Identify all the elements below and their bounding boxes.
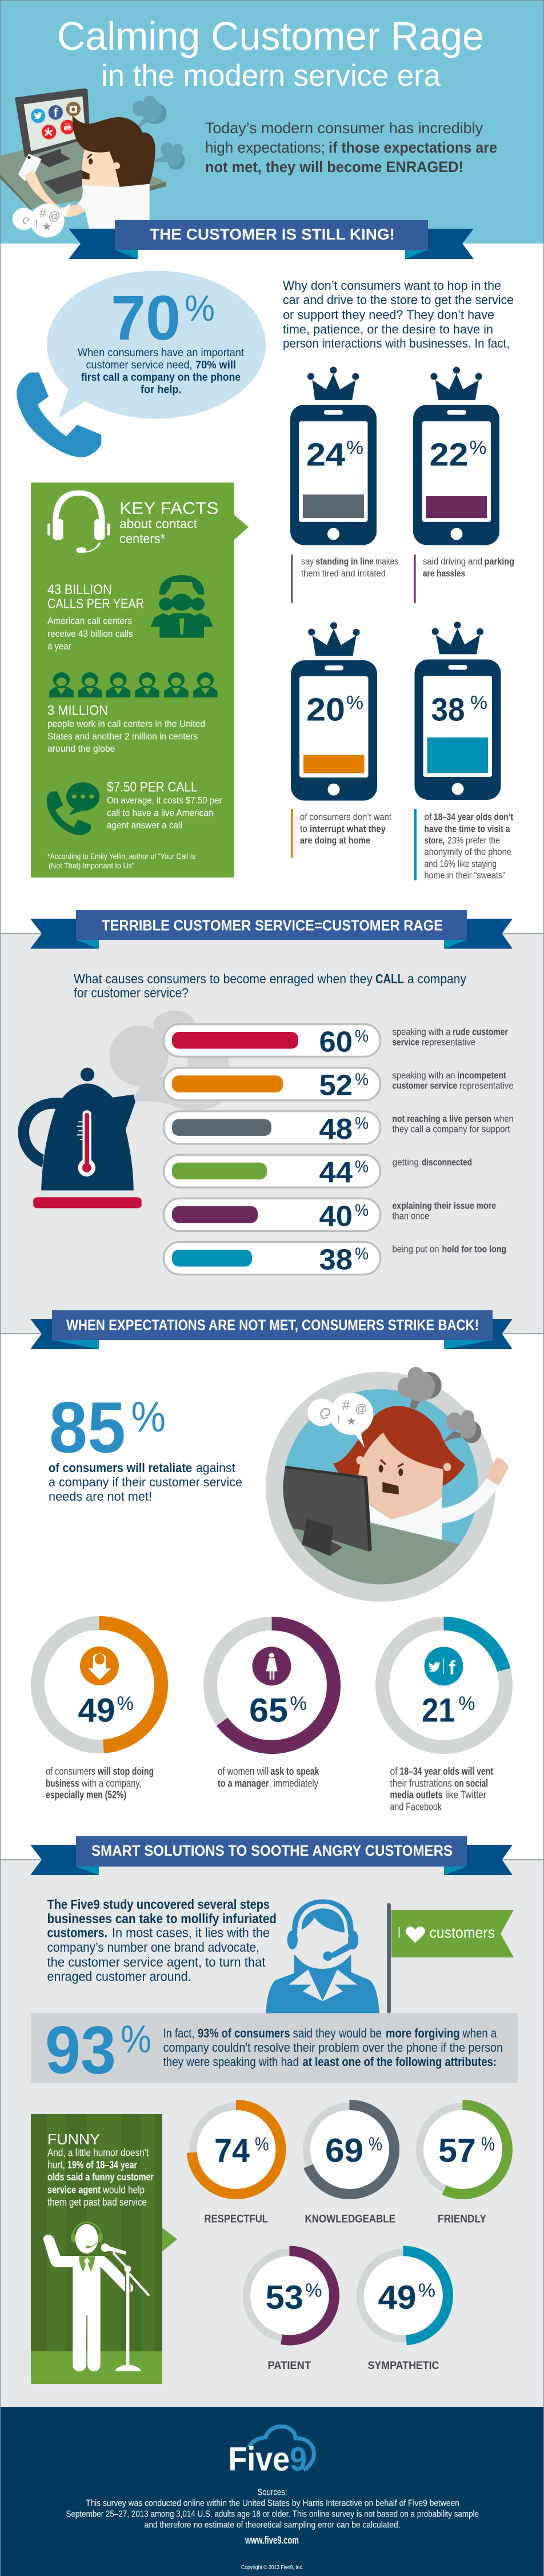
text: why don't consumers: Why don’t consumers want to hop in the	[283, 278, 501, 293]
stat: 85% retaliate: against	[196, 1461, 235, 1475]
text: why don't consumers: or support they need? They don’t have	[283, 308, 494, 322]
speech bubble: 70% call first: for help.	[141, 384, 182, 396]
question heading: for customer service?	[74, 986, 189, 1000]
fact: $7.50 per call: $7.50 PER CALL	[107, 780, 198, 795]
bar: getting disconnected 44%: %	[355, 1158, 369, 1177]
bar: rude representative 60%: speaking with a	[392, 1027, 451, 1037]
bar: rude representative 60%: service	[392, 1037, 419, 1047]
bar: rude representative 60%	[163, 1024, 508, 1058]
donut: 74% respectful: 74	[214, 2132, 250, 2169]
panel: 93% more forgiving: when a	[462, 2026, 497, 2040]
phone: 24%: them tired and irritated	[301, 568, 386, 579]
panel: key facts	[31, 482, 249, 878]
donut: 21% vent on social media: on social	[454, 1778, 488, 1789]
donut: 65% of women ask for manager: to a manager	[218, 1778, 269, 1789]
question heading: What causes consumers to become enraged when they	[74, 971, 373, 986]
donut: 49% stop doing business: especially men (52%)	[46, 1789, 126, 1801]
heading: key facts: KEY FACTS	[119, 499, 218, 518]
panel: 93% more forgiving: In fact,	[163, 2026, 194, 2040]
phone: 20%: 20	[306, 692, 345, 728]
panel: funny: olds said a funny customer	[47, 2171, 154, 2183]
bar: incompetent representative 52%: incompetent	[457, 1070, 506, 1080]
icon: comedian at microphone	[43, 2222, 149, 2371]
donut: 49% stop doing business: with a company,	[81, 1778, 142, 1789]
donut: 65% of women ask for manager: , immediately	[269, 1778, 318, 1789]
fact: 3 million: around the globe	[47, 743, 115, 754]
donut: 65% of women ask for manager: ask to speak	[271, 1765, 319, 1777]
phone: 38%	[414, 621, 513, 880]
sources: September 25–27, 2013 among 3,014 U.S. adults age 18 or older. This online survey is not based on a probability sample	[66, 2510, 479, 2519]
donut: 21% vent on social media: f	[449, 1657, 455, 1679]
speech bubble: 70% call first	[47, 271, 266, 418]
panel: funny: FUNNY	[47, 2132, 100, 2148]
question heading: CALL	[375, 971, 404, 986]
phone: 24%	[290, 367, 398, 603]
fact: $7.50 per call: call to have a live American	[107, 807, 214, 819]
phone: 38%: %	[470, 692, 487, 713]
icon: telephone handset	[17, 373, 101, 457]
illustration: angry woman at computer: ★	[346, 1415, 357, 1428]
flag: I love customers	[387, 1903, 514, 2013]
icon: white headset	[47, 491, 110, 553]
donut: 49% stop doing business	[38, 1623, 161, 1801]
bar: on hold too long 38%: 38	[319, 1243, 353, 1276]
phone: 22%: 22	[430, 437, 469, 473]
banner: the customer is still king	[69, 220, 474, 259]
icon: customer service agent	[266, 1899, 379, 2013]
panel: 93% more forgiving: they were speaking with had	[163, 2055, 299, 2069]
phone: 20%	[291, 622, 391, 858]
bar: rude representative 60%: representative	[422, 1037, 475, 1047]
donut: 53% patient: PATIENT	[267, 2360, 311, 2372]
panel: 93% more forgiving: 93% of consumers	[198, 2026, 290, 2040]
donut: 74% respectful: %	[255, 2134, 269, 2154]
stat: 85% retaliate: needs are not met!	[49, 1489, 152, 1504]
phone: 22%	[413, 367, 514, 603]
intro text: not met, they will become ENRAGED!	[205, 158, 463, 176]
illustration: angry man at computer: f	[54, 106, 58, 120]
donut: 49% stop doing business: will stop doing	[97, 1765, 154, 1777]
fact: 43 billion calls: American call centers	[47, 615, 132, 627]
speech bubble: man cursing: @	[48, 210, 61, 223]
footnote	[47, 852, 195, 870]
illustration: angry man at computer: You	[65, 123, 71, 127]
text: why don't consumers: car and drive to the store to get the service	[283, 293, 514, 307]
phone: 38%: 23% prefer the	[447, 836, 500, 846]
donut: 57% friendly: %	[481, 2134, 495, 2154]
fact: 43 billion calls: 43 BILLION	[47, 582, 112, 597]
panel: 93% more forgiving: %	[121, 2017, 151, 2061]
text: Five9 study: The Five9 study uncovered several steps	[47, 1897, 270, 1912]
panel: funny: hurt,	[47, 2159, 65, 2171]
sources: and therefore no estimate of theoretical sampling error can be calculated.	[144, 2520, 400, 2530]
phone: 38%: and 16% like staying	[424, 859, 497, 869]
panel: funny: And, a little humor doesn't	[47, 2147, 149, 2159]
footnote: (Not That) Important to Us”	[49, 861, 134, 870]
illustration: angry woman at computer: #	[342, 1398, 350, 1413]
flag: I love customers: I	[398, 1924, 401, 1941]
phone: 20%: of consumers don’t want	[300, 812, 391, 822]
fact: 43 billion calls: a year	[47, 641, 71, 652]
bar: on hold too long 38%: %	[355, 1245, 369, 1263]
phone: 38%: store,	[424, 836, 445, 846]
bar: rude representative 60%: %	[355, 1027, 369, 1046]
donut: 21% vent on social media: and Facebook	[390, 1801, 442, 1812]
bar: not reaching a live person 48%: when	[494, 1114, 513, 1124]
fact: 43 billion calls: CALLS PER YEAR	[47, 596, 144, 612]
phone: 20%: interrupt what they	[310, 824, 386, 835]
donut: 21% vent on social media: %	[458, 1693, 475, 1714]
banner: terrible customer service	[30, 910, 513, 949]
illustration: angry woman at computer: @	[355, 1402, 367, 1415]
text: Five9 study: customers.	[47, 1925, 107, 1940]
panel: 93% more forgiving: said they would be	[293, 2026, 382, 2040]
phone: 24%: makes	[375, 557, 398, 567]
donut: 65% of women ask for manager	[210, 1624, 334, 1789]
donut: 49% sympathetic: SYMPATHETIC	[368, 2360, 439, 2372]
stat: 85% retaliate: of consumers will retaliate	[49, 1461, 192, 1475]
phone: 38%: 18–34 year olds don’t	[434, 812, 513, 822]
fact: 43 billion calls: receive 43 billion calls	[47, 628, 133, 639]
text: why don't consumers: time, patience, or the desire to have in	[283, 322, 493, 336]
donut: 53% patient: %	[305, 2280, 322, 2300]
title: Calming Customer Rage	[57, 14, 484, 58]
intro text: Today’s modern consumer has incredibly	[205, 119, 483, 137]
illustration: angry woman at computer	[263, 1367, 510, 1614]
bar: rude representative 60%: 60	[319, 1026, 353, 1058]
bar: incompetent representative 52%	[163, 1068, 513, 1102]
stat: 85% retaliate: a company if their customer service	[49, 1475, 242, 1489]
fact: $7.50 per call	[107, 780, 222, 831]
fact: 43 billion calls	[47, 582, 144, 652]
intro text: high expectations;	[205, 139, 325, 156]
question heading	[74, 971, 466, 1000]
banner: the customer is still king: THE CUSTOMER IS STILL KING!	[150, 226, 395, 243]
phone: 22%: %	[470, 437, 487, 458]
bar: explaining more than once 40%	[163, 1198, 496, 1232]
panel: funny	[31, 2114, 177, 2384]
intro text: if those expectations are	[329, 139, 497, 156]
donut: 21% vent on social media: media outlets	[390, 1789, 442, 1801]
icon: boiling kettle with thermometer	[18, 1011, 229, 1208]
text: Five9 study: enraged customer around.	[47, 1969, 191, 1984]
speech bubble: man cursing: #	[39, 206, 47, 220]
phone: 24%: standing in line	[315, 557, 374, 567]
bar: on hold too long 38%: hold for too long	[442, 1244, 506, 1254]
donut: 74% respectful: RESPECTFUL	[205, 2214, 268, 2225]
text: Five9 study: businesses can take to mollify infuriated	[47, 1911, 277, 1926]
icon: phone with chat bubble	[47, 782, 99, 835]
phone: 38%: anonymity of the phone	[424, 847, 511, 858]
panel: 93% more forgiving: company couldn't resolve their problem over the phone if the person	[163, 2040, 503, 2055]
bar: incompetent representative 52%: %	[355, 1070, 369, 1089]
speech bubble: man cursing: !	[35, 218, 38, 230]
phone: 24%: say	[301, 557, 314, 567]
title	[57, 14, 484, 93]
donut: 49% stop doing business: 49	[78, 1692, 115, 1729]
stat: 85% retaliate: %	[131, 1393, 166, 1441]
speech bubble: man cursing	[13, 204, 70, 238]
bar: on hold too long 38%	[163, 1242, 506, 1276]
donut: 69% knowledgeable: 69	[325, 2132, 363, 2169]
heading: key facts: centers*	[119, 531, 165, 546]
bar: explaining more than once 40%: explaining their issue more	[392, 1201, 496, 1211]
bar: incompetent representative 52%: speaking with an	[392, 1070, 455, 1080]
donut: 69% knowledgeable: KNOWLEDGEABLE	[305, 2214, 395, 2225]
donut: 49% stop doing business: of consumers	[46, 1765, 95, 1777]
speech bubble: 70% call first: first call a company on the phone	[81, 372, 241, 384]
speech bubble: 70% call first: %	[185, 288, 215, 329]
bar: incompetent representative 52%: customer service	[392, 1080, 457, 1091]
donut: 53% patient: 53	[265, 2279, 303, 2316]
text: Five9 study: the customer service agent, to turn that	[47, 1955, 266, 1969]
fact: $7.50 per call: agent answer a call	[107, 820, 182, 831]
donut: 65% of women ask for manager: %	[290, 1693, 307, 1714]
footnote: *According to Emily Yellin, author of “Your Call Is	[47, 852, 195, 861]
bar: explaining more than once 40%: %	[355, 1201, 369, 1220]
donut: 53% patient	[245, 2251, 334, 2372]
bar: explaining more than once 40%: 40	[319, 1199, 353, 1232]
banner: consumers strike back: WHEN EXPECTATIONS ARE NOT MET, CONSUMERS STRIKE BACK!	[66, 1316, 479, 1333]
donut: 49% sympathetic: 49	[378, 2279, 416, 2316]
speech bubble: man cursing: ★	[42, 221, 52, 233]
copyright: Copyright © 2013 Five9, Inc.	[241, 2564, 303, 2571]
phone: 24%: 24	[306, 437, 345, 473]
bar: getting disconnected 44%: disconnected	[422, 1157, 472, 1167]
phone: 22%: parking	[485, 557, 514, 567]
donut: 21% vent on social media: like Twitter	[445, 1789, 486, 1801]
speech bubble: 70% call first: 70	[111, 283, 181, 353]
donut: 21% vent on social media: 21	[422, 1692, 455, 1729]
donut: 21% vent on social media	[382, 1624, 506, 1812]
donut: 57% friendly: 57	[438, 2132, 476, 2169]
donut: 21% vent on social media: their frustrations	[390, 1778, 452, 1789]
logo: Five9	[229, 2426, 314, 2478]
phone: 38%: 38	[431, 692, 465, 728]
intro text	[205, 119, 497, 176]
bar: getting disconnected 44%: 44	[319, 1156, 353, 1189]
phone: 38%: have the time to visit a	[424, 824, 510, 835]
banner: terrible customer service: TERRIBLE CUSTOMER SERVICE=CUSTOMER RAGE	[102, 917, 443, 934]
bar: getting disconnected 44%: getting	[392, 1157, 419, 1167]
donut: 65% of women ask for manager: 65	[249, 1692, 288, 1729]
speech bubble: 70% call first: customer service need,	[86, 359, 192, 372]
stat: 85% retaliate	[49, 1387, 242, 1504]
panel: 93% more forgiving	[31, 2012, 518, 2088]
donut: 49% sympathetic	[359, 2251, 448, 2372]
donut: 49% stop doing business: %	[117, 1693, 134, 1714]
text: Five9 study: In most cases, it lies with the	[112, 1925, 270, 1940]
phone: 24%: %	[346, 437, 363, 458]
bar: rude representative 60%: rude customer	[453, 1027, 508, 1037]
icon: call center team	[150, 575, 213, 638]
panel: funny: would help	[102, 2184, 145, 2195]
panel: 93% more forgiving: at least one of the following attributes:	[303, 2055, 497, 2069]
bar: explaining more than once 40%: than once	[392, 1211, 429, 1221]
stat: 85% retaliate: 85	[49, 1387, 126, 1468]
illustration: angry man at computer: Tube	[64, 127, 71, 130]
logo: Five9: TM	[304, 2469, 308, 2472]
fact: $7.50 per call: On average, it costs $7.50 per	[107, 795, 222, 806]
speech bubble: 70% call first: 70% will	[195, 359, 236, 372]
fact: 3 million: 3 MILLION	[47, 703, 108, 718]
panel: 93% more forgiving: 93	[45, 2012, 116, 2088]
icon: row of six agents	[49, 672, 218, 697]
fact: 3 million: people work in call centers in the United	[47, 718, 205, 729]
panel: funny: service agent	[47, 2184, 101, 2195]
banner: consumers strike back	[30, 1310, 513, 1349]
donut: 57% friendly: FRIENDLY	[438, 2214, 486, 2225]
illustration: angry woman at computer: !	[337, 1414, 340, 1426]
phone: 22%: said driving and	[423, 557, 482, 567]
logo: Five9: 9	[290, 2441, 307, 2478]
donut: 57% friendly	[418, 2105, 507, 2225]
sources: This survey was conducted online within the United States by Harris Interactive on behalf of Five9 between	[86, 2498, 459, 2509]
panel: 93% more forgiving: more forgiving	[386, 2026, 459, 2040]
bar: on hold too long 38%: being put on	[392, 1244, 439, 1254]
donut: 69% knowledgeable	[305, 2105, 395, 2225]
phone: 20%: %	[346, 692, 363, 713]
bar: not reaching a live person 48%: 48	[319, 1112, 353, 1145]
fact: 3 million: States and another 2 million in centers	[47, 731, 198, 742]
phone: 38%: home in their “sweats”	[424, 870, 505, 880]
donut: 74% respectful	[192, 2105, 281, 2225]
text: Five9 study	[47, 1897, 277, 1984]
fact: 3 million	[47, 703, 205, 754]
panel: funny: 19% of 18–34 year	[67, 2159, 137, 2171]
banner: smart solutions: SMART SOLUTIONS TO SOOTHE ANGRY CUSTOMERS	[91, 1842, 453, 1859]
bar: incompetent representative 52%: 52	[319, 1069, 353, 1102]
panel: funny: them get past bad service	[47, 2196, 147, 2208]
bar: getting disconnected 44%	[163, 1155, 472, 1189]
donut: 49% sympathetic: %	[418, 2280, 435, 2300]
flag: I love customers: customers	[430, 1924, 495, 1941]
phone: 20%: to	[300, 824, 307, 835]
phone: 20%: are doing at home	[300, 836, 370, 846]
sources: www.five9.com	[245, 2535, 299, 2546]
phone: 38%: of	[424, 812, 432, 822]
bar: incompetent representative 52%: representative	[459, 1080, 513, 1091]
donut: 49% stop doing business: business	[46, 1778, 79, 1789]
donut: 65% of women ask for manager: of women will	[218, 1765, 269, 1777]
text: Five9 study: company’s number one brand advocate,	[47, 1940, 259, 1955]
text: why don't consumers: person interactions with businesses. In fact,	[283, 336, 510, 350]
text: why don't consumers	[283, 278, 514, 350]
donut: 21% vent on social media: of	[390, 1765, 398, 1777]
donut: 69% knowledgeable: %	[369, 2134, 382, 2154]
speech bubble: 70% call first: When consumers have an important	[78, 347, 245, 359]
heading: key facts	[119, 499, 218, 546]
bar: not reaching a live person 48%	[163, 1111, 513, 1145]
donut: 21% vent on social media: 18–34 year olds will vent	[400, 1765, 493, 1777]
question heading: a company	[407, 971, 466, 986]
bar: not reaching a live person 48%: %	[355, 1114, 369, 1133]
title: in the modern service era	[101, 59, 441, 93]
banner: smart solutions	[30, 1836, 513, 1875]
sources: Sources:	[257, 2488, 287, 2497]
bar: not reaching a live person 48%: not reaching a live person	[392, 1114, 491, 1124]
illustration: angry man at computer	[0, 88, 185, 229]
heading: key facts: about contact	[119, 516, 198, 531]
logo: Five9: Five	[229, 2441, 290, 2478]
phone: 22%: are hassles	[423, 568, 465, 579]
sources	[66, 2488, 479, 2546]
bar: not reaching a live person 48%: they call a company for support	[392, 1124, 510, 1134]
